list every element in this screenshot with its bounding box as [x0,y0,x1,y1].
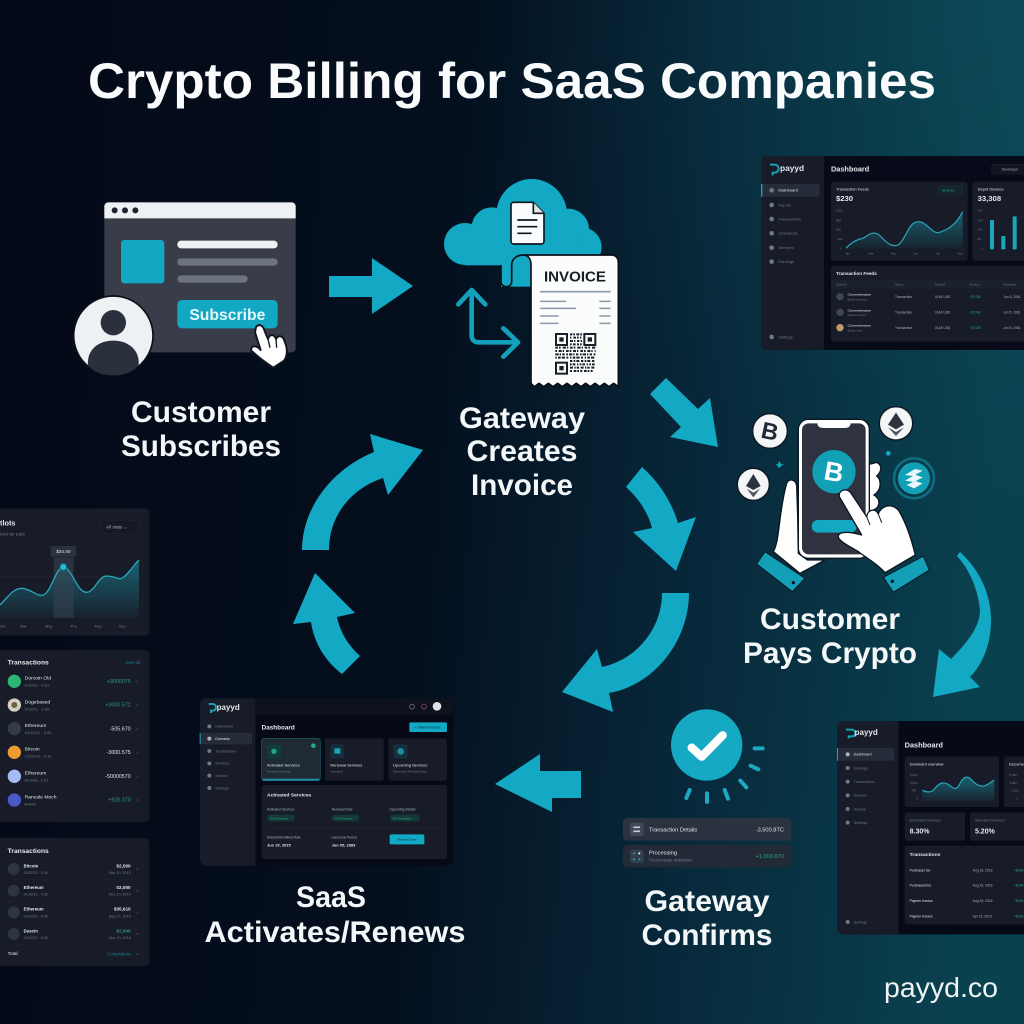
arrow: gateway to customer pays [650,378,718,447]
button: client account: + Client Account [414,726,441,730]
card: domain overview chart [905,756,999,807]
card: transaction feeds chart: Jan [845,252,850,256]
panel: left chart card [0,508,149,636]
table: transaction feeds: Colormarketplace [848,308,871,312]
sidebar navigation: Services [215,762,230,766]
table: transaction feeds: +$7438 [969,326,981,330]
panel: left chart card: $34.00 [56,549,71,554]
panel: left chart card: May [45,624,53,629]
panel: left transactions summary: $2,500 [116,863,131,868]
label: customer pays crypto [743,603,917,670]
label: customer pays crypto: Customer [760,603,900,636]
panel: left transactions summary: Ethereum [24,885,44,890]
panel: left transactions list: Ethereum [25,771,46,777]
card: domain overview chart: 3,000 [910,781,918,785]
stat: second metric [970,812,1024,841]
icon: bitcoin coin: B [759,417,781,446]
panel: left transactions list: 6/12/21 · 1.00 [25,706,50,711]
stat: second metric: 5.20% [975,828,996,835]
table: transaction feeds: Jun 5, 2061 [1003,295,1021,299]
panel: left transactions summary: Total [8,951,18,956]
button: client account [409,722,447,732]
card: transaction feeds chart: Transaction Feeds [836,186,869,191]
row: transaction details: Transaction Details [649,827,697,833]
label: gateway confirms: Confirms [642,919,772,952]
table: transactions: Purchaser too [910,868,931,872]
section: activated services details: Upcoming Details [389,808,416,812]
panel: left transactions list: See all [126,660,140,665]
sidebar navigation: Invoices [854,794,867,798]
panel: left transactions list: Ethereum [25,723,46,729]
sidebar navigation: Domains [215,737,230,741]
card: domain chart partial: 1,000 [1011,789,1018,793]
card: transaction feeds chart [831,182,968,261]
table: transaction feeds: Transaction [895,311,912,315]
panel: left transactions summary: Dascin [24,928,38,933]
sidebar navigation: Settings [854,821,867,825]
panel: left transactions list: › [136,750,138,756]
card: domain chart partial: 0 [1017,797,1019,801]
table: transaction feeds: 0146 USD [935,311,951,315]
section: activated services details: Subscribed Billed Rate [267,836,301,840]
card: domain chart partial: 5,000 [1009,773,1017,777]
card: bar chart: 0 [982,247,984,251]
table: transactions: Paymer Invoice [910,899,933,903]
table: transactions: Purchased too [910,884,931,888]
panel: left transactions list: +926.370 [108,798,131,804]
stat: first metric: 8.30% [910,828,930,835]
section: activated services details: Lanceous Period [332,836,357,840]
right hand fingers behind phone [865,462,881,511]
panel: left transactions summary: 01/02/21 · 0.50 [24,893,48,897]
table: transaction feeds: 0148 USD [935,295,951,299]
sidebar navigation: Transactions [215,749,236,753]
label: customer subscribes: Customer [131,396,271,429]
panel: left transactions list: -50000570 [105,774,131,780]
panel: left transactions summary: Bitcoin [24,863,39,868]
table: transactions: Transactions [910,852,941,858]
label: customer subscribes: Subscribes [121,430,281,463]
card: domain overview chart: Dominant overview [910,761,944,766]
panel: left transactions list: › [136,703,138,709]
panel: left transactions list: Bitcoin [25,747,40,753]
left hand [757,480,825,592]
table: transaction feeds: Amount [969,282,980,286]
table: transaction feeds: 0128 USD [935,326,951,330]
card: domain chart partial [1004,756,1024,807]
panel: left transactions summary: $2,000 [116,928,131,933]
icon: pointer hand [251,325,287,368]
panel: bottom right dashboard: Dashboard [905,741,943,750]
table: transaction feeds: Bitcoin token [848,328,863,332]
sidebar navigation: Service [854,807,866,811]
table: transactions [905,846,1024,924]
panel: left chart card: Sep [119,624,127,629]
panel: left transactions summary: Sep 10, 2019 [109,871,131,875]
panel: top right dashboard: Dashboard [831,165,869,174]
browser window [104,202,296,352]
panel: left transactions list: Dorcoin Old [25,676,51,682]
table: transactions: Aug 15, 2018 [973,868,993,872]
sidebar navigation: Dashboard [778,188,798,193]
QR code [555,334,596,374]
panel: left transactions summary: Completions [107,951,131,956]
label: gateway creates invoice: Gateway [459,402,585,435]
card: transaction feeds chart: 0 [840,247,842,251]
card: activated services: Renewal Services [267,770,291,774]
panel: left transactions summary: $35,610 [114,907,131,912]
card: domain chart partial: 3,000 [1009,781,1017,785]
sidebar navigation: Service [215,774,228,778]
panel: left transactions list: Rancale Moch [25,794,57,800]
card: transaction feeds chart: Services [942,188,955,192]
brand: payyd.co: payyd.co [884,972,998,1003]
arrow: curved to gateway [302,434,423,550]
panel: left transactions summary: Sep 07, 2019 [109,914,131,918]
sidebar navigation: Settings [778,334,793,339]
panel: left transactions summary: 02,000 [116,885,131,890]
panel: left transactions list: $44/Hr [25,801,37,806]
panel: left transactions summary: › [136,951,138,957]
card: domain overview chart: 5,000 [910,773,918,777]
panel: left transactions summary: 03/02/21 · 0.50 [24,914,48,918]
sidebar navigation: Dashboard [854,753,872,757]
icon: ethereum coin left [737,468,769,500]
row: processing: Processing [649,851,677,857]
card: transaction feeds chart: $230 [836,194,853,203]
icon: phone payment with coins [737,407,934,592]
stat: second metric: Standard bonuses [975,819,1005,823]
stat: first metric [905,812,965,841]
card: transaction feeds chart: Jun [935,252,940,256]
icon: subscribe browser window with avatar [74,202,296,375]
arrow: gateway to confirm curved [626,467,696,571]
invoice receipt: INVOICE [544,269,606,285]
table: transactions: +$348 [1014,884,1023,888]
label: SaaS activates/renews: Activates/Renews [204,916,466,949]
label: gateway creates invoice [459,402,585,502]
table: transactions: +$348 [1014,868,1023,872]
invoice receipt [501,255,618,387]
panel: left transactions summary [0,838,149,966]
table: transaction feeds: +$7438 [969,295,981,299]
label: customer subscribes [121,396,281,463]
arrow: customer pays to gateway confirms curved [933,552,991,697]
table: transaction feeds: Colormarketplace [848,324,871,328]
table: transaction feeds: Coiners [836,282,847,286]
table: transaction feeds: Bitcoin purchase [848,297,868,301]
card: transaction feeds chart: Apr [913,252,918,256]
label: SaaS activates/renews: SaaS [296,881,366,914]
row: processing: +1,000.870 [756,854,784,860]
panel: left transactions list: Domain, 0.01 [25,778,49,783]
subscribe button [177,300,278,328]
panel: left transactions summary: 03/02/21 · 0.50 [24,936,48,940]
label: SaaS activates/renews [204,881,466,949]
sidebar navigation [200,703,252,790]
panel: left transactions list: +3000075 [107,679,131,685]
section: activated services details: Activated Services [267,808,295,812]
table: transaction feeds: Received [1003,282,1016,286]
smartphone [798,419,869,558]
panel: SaaS activation dashboard [200,698,453,866]
table: transaction feeds: Transaction [895,326,912,330]
card: transaction feeds chart: Sep [957,252,963,256]
panel: left chart card: Aug [94,624,101,629]
panel: left transactions summary: Nov 10, 2019 [109,936,131,940]
card: renewal services: Activated [330,770,343,774]
panel: left transactions list [0,650,149,822]
table: transaction feeds: Colormarketplace [848,293,871,297]
card: bar chart: 50 [978,237,981,241]
arrow: subscribe to gateway [329,258,413,314]
panel: bottom right dashboard [837,721,1024,934]
panel: left transactions summary: Ethereum [24,907,44,912]
section: activated services details: Renewal Dues [397,838,417,842]
panel: left transactions list: 04/12/21 · 0.50 [25,730,52,735]
card: transaction feeds chart: 1000 [836,209,843,213]
sidebar navigation: payyd [217,703,240,712]
section: activated services details: Renewal Date [332,808,353,812]
arrow: confirm to saas curved large [562,593,689,712]
icon: avatar [74,296,153,375]
panel: left transactions summary: Dec 10, 2019 [109,893,131,897]
section: activated services details: Re-renewable [393,816,412,820]
card: renewal services [325,738,384,781]
card: upcoming services: Upcoming Services [393,763,427,768]
card: transaction feeds chart: Nov [891,252,897,256]
card: bar chart: 100 [978,209,983,213]
card: transaction feeds chart: 300 [837,237,843,241]
arrow: confirm to activate [495,754,581,812]
sidebar navigation: payyd [855,728,878,737]
sidebar navigation: payyd [780,163,804,173]
table: transaction feeds: Method [935,282,945,286]
section: activated services details: Jun 05, 2083 [332,843,356,848]
panel: left transactions summary: › [136,910,138,916]
card: bar chart [972,182,1024,261]
panel: left transactions list: -505.670 [110,726,131,732]
icon: cloud and invoice [444,179,618,387]
sparkles [775,461,784,468]
card: transaction feeds chart: Mar [868,252,873,256]
sidebar navigation: Earnings [778,259,794,264]
panel: left transactions list: -3000.575 [107,750,131,756]
section: activated services details: Activated Services [267,792,312,798]
panel: left transactions list: Transactions [8,660,49,667]
right hand pointing [838,490,929,592]
sidebar navigation: Services [778,245,794,250]
table: transaction feeds: Jun 5, 2061 [1003,311,1021,315]
panel: left transactions list: › [136,798,138,804]
icon: bitcoin coin [753,414,787,448]
panel: left chart card: Mar [20,624,28,629]
title: Crypto Billing for SaaS Companies [88,53,936,109]
icon: sync arrows [458,290,518,357]
sidebar navigation: Operations [778,231,798,236]
cloud with document [444,179,602,287]
table: transaction feeds: Transaction [895,295,912,299]
table: transaction feeds: Status [895,282,904,286]
section: activated services details: Jun 15, 2015 [267,843,291,848]
card: bar chart: 100 [978,228,983,232]
card: domain overview chart: 0 [917,797,919,801]
table: transaction feeds: Transaction Feeds [836,271,877,276]
card: bar chart: Depot Devices [978,186,1004,191]
panel: left transactions list: › [136,774,138,780]
table: transactions: Aug 15, 2018 [973,884,993,888]
card: activated services: Activated Services [267,763,300,768]
panel: left transactions summary: 03/02/21 · 0.50 [24,871,48,875]
row: processing: Presumarge animation [649,858,693,863]
card: upcoming services [388,738,447,781]
section: activated services details: On Renewed [270,816,288,820]
panel: left transactions summary: › [136,932,138,938]
panel: left chart card: reet ter pots [0,531,26,536]
sidebar navigation [837,728,894,924]
sidebar navigation: Transactions [778,216,801,221]
panel: left transactions list: Dogebased [25,699,50,705]
sidebar navigation: Depots [778,202,791,207]
label: gateway confirms [642,885,772,952]
table: transactions: Paymer Invoice [910,915,933,919]
sidebar navigation: Settings [854,920,867,924]
icon: ethereum coin top [879,407,913,440]
sidebar navigation: Earnings [854,766,868,770]
sidebar navigation: Transactions [854,780,875,784]
arrow: activates back up to loop [293,573,360,674]
card: upcoming services: Exhausted Renewal Date [393,770,427,774]
table: transaction feeds: Ethereum token [848,313,867,317]
panel: top right dashboard: Developer [1002,168,1019,172]
label: gateway confirms: Gateway [644,885,770,918]
smartphone: B [822,456,846,488]
panel: left transactions list: › [136,726,138,732]
card: renewal services: Renewal Services [330,763,362,768]
card: transaction feeds chart: 500 [836,228,841,232]
panel: left transactions summary: › [136,867,138,873]
card: transaction feeds chart: 800 [836,218,841,222]
panel: left chart card: tlots [0,518,15,527]
panel: left chart card: Thu [70,624,77,629]
icon: gateway confirmation check [623,709,791,867]
card: bar chart: 33,308 [978,194,1002,203]
table: transactions: Apr 15, 2019 [973,915,992,919]
panel: left transactions list: › [136,679,138,685]
label: gateway creates invoice: Invoice [471,469,573,502]
panel: left chart card: All stats ⌄ [106,525,128,530]
sidebar navigation: Dashboard [215,725,233,729]
subscribe button: Subscribe [189,307,265,324]
row: transaction details [623,818,791,841]
table: transactions: +$348 [1014,915,1023,919]
row: processing [623,845,791,867]
row: transaction details: -3,500.8TC [756,827,784,833]
panel: left transactions list: +3000.572 [105,703,131,709]
card: domain overview chart: 750 [911,789,917,793]
label: gateway creates invoice: Creates [466,435,578,468]
panel: left transactions summary: Transactions [8,848,49,855]
panel: left transactions summary: › [136,888,138,894]
table: transaction feeds: Jun 5, 2061 [1003,326,1021,330]
section: activated services details: On Renewed [335,816,352,820]
panel: SaaS activation dashboard: Dashboard [262,724,295,731]
top bar icons [410,702,441,711]
table: transactions: +$348 [1014,899,1023,903]
stat: first metric: Estimated bonuses [910,819,941,823]
section: activated services details [262,785,447,859]
table: transaction feeds: +$7348 [969,311,981,315]
sidebar navigation [761,163,819,339]
label: customer pays crypto: Pays Crypto [743,637,917,670]
panel: top right dashboard [761,156,1024,350]
card: activated services [262,738,320,781]
panel: left transactions list: 0/10/01 · 0.01 [25,683,50,688]
table: transactions: Aug 15, 2018 [973,899,993,903]
panel: left transactions list: 12/02/20 · 0.10 [25,754,52,759]
table: transaction feeds [831,266,1024,342]
sidebar navigation: Settings [215,786,229,790]
icon: teal token [894,458,934,498]
card: bar chart: 150 [978,218,983,222]
